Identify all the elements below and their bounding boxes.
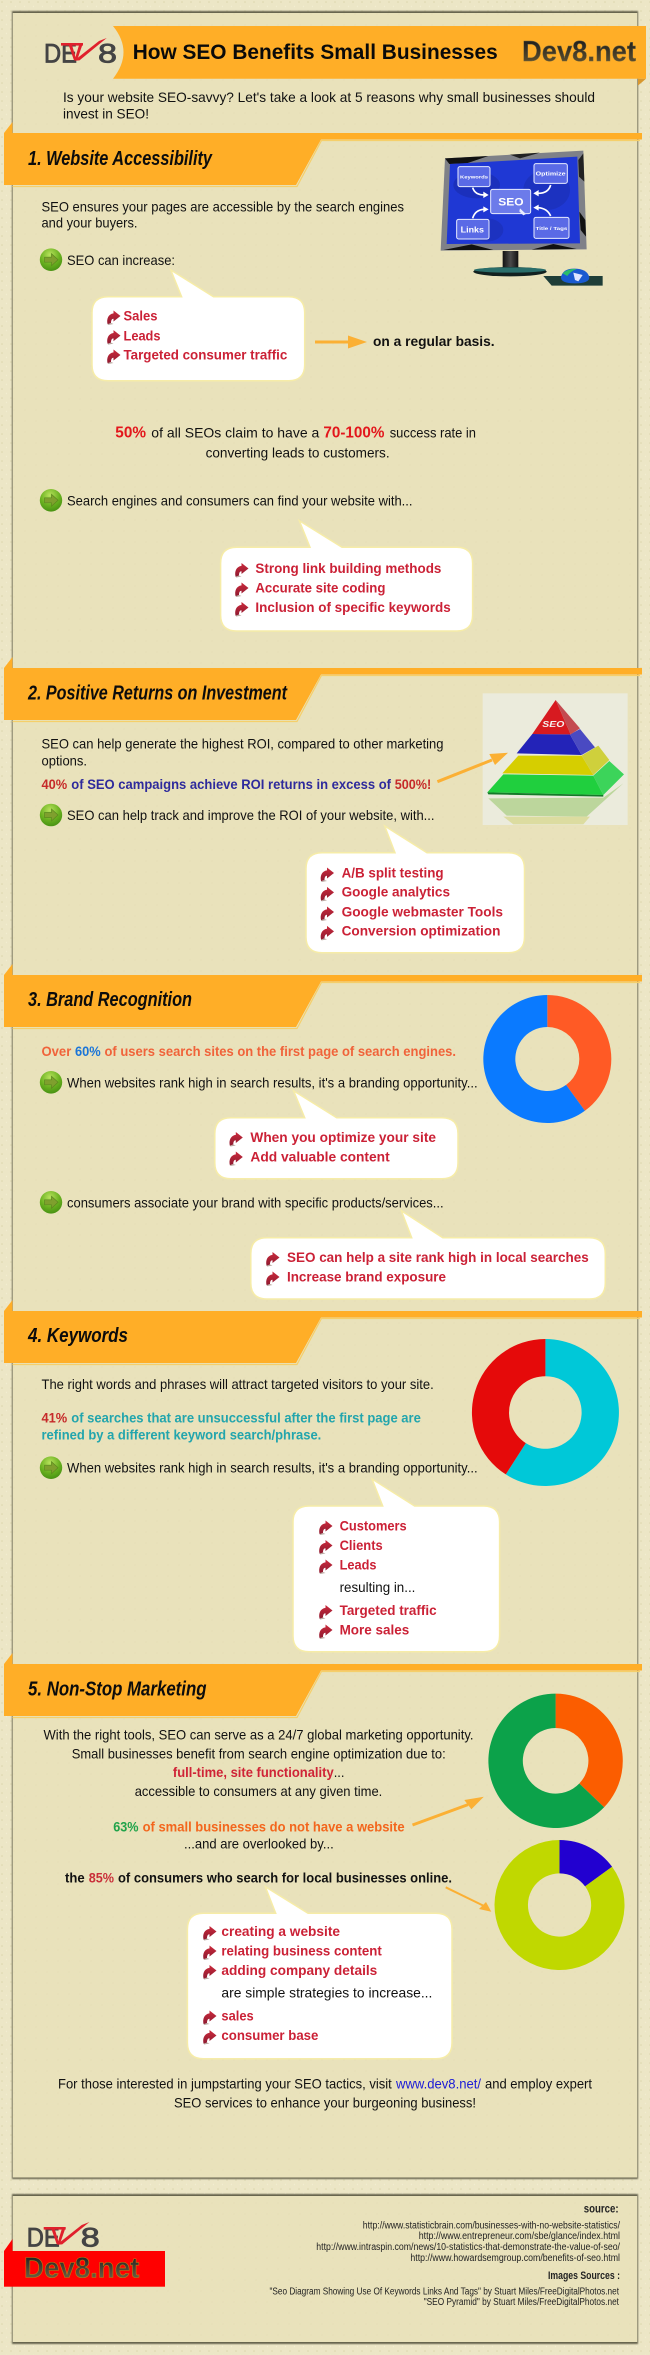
section 4 heading: 4. Keywords — [27, 1325, 128, 1347]
item: relating business content: relating business content — [221, 1943, 382, 1959]
stat: 50% success rate — [115, 425, 476, 460]
icon: red arrow — [107, 330, 120, 345]
box: SEO — [491, 189, 531, 214]
section 2 ribbon — [4, 657, 642, 722]
stat: 60% of users: of users search sites on the first page of search engines. — [104, 1043, 456, 1059]
box: Links: Links — [461, 225, 485, 234]
footer sources: http://www.entrepreneur.com/sbe/glance/index.html — [419, 2231, 620, 2242]
icon: red arrow — [229, 1132, 243, 1146]
closing text: For those interested in jumpstarting your SEO tactics, visit — [58, 2077, 392, 2092]
icon: red arrow — [229, 1152, 243, 1166]
box: Keywords — [458, 167, 490, 187]
icon: red arrow — [235, 602, 248, 616]
box: Links — [457, 219, 489, 239]
paragraph: 24/7 marketing: full-time, site functionality — [173, 1764, 334, 1780]
panel: footer background — [13, 2196, 637, 2342]
stat: 40% of campaigns: 500%! — [395, 776, 431, 792]
footer sources: http://www.howardsemgroup.com/benefits-of-seo.html — [410, 2253, 620, 2264]
logo: DEV8 header: DE — [44, 38, 77, 68]
icon: green bullet — [40, 1191, 62, 1214]
paragraph: accessibility — [42, 200, 404, 230]
panel: section 1 website accessibility — [4, 122, 642, 631]
logo: DEV8 header — [44, 38, 117, 68]
item: Increase brand exposure: Increase brand exposure — [287, 1269, 446, 1285]
closing text — [58, 2077, 592, 2111]
stat: 50% success rate: 70-100% — [323, 425, 384, 442]
stat: 41% of searches — [42, 1410, 421, 1442]
icon: red arrow — [321, 887, 334, 901]
text: consumers associate: consumers associate your brand with specific products/services... — [67, 1195, 444, 1210]
icon: green bullet — [40, 1071, 62, 1094]
illustration: SEO monitor — [441, 151, 603, 286]
item: When you optimize your site: When you optimize your site — [250, 1129, 436, 1145]
title: How SEO Benefits Small Businesses — [133, 40, 498, 64]
item: Leads: Leads — [124, 327, 161, 343]
stat: 63% of small businesses: of small businesses do not have a website — [143, 1819, 405, 1835]
panel: section 2 positive returns — [4, 657, 642, 953]
item: creating a website: creating a website — [221, 1923, 340, 1939]
logo: DEV8 footer — [27, 2222, 100, 2252]
icon: red arrow — [321, 906, 334, 921]
icon: red arrow — [107, 350, 120, 364]
donut chart: 63% of small businesses — [488, 1694, 623, 1828]
paragraph: 24/7 marketing: With the right tools, SEO can serve as a 24/7 global marketing opportunity. — [44, 1727, 474, 1742]
stat: 50% success rate: converting leads to customers. — [206, 444, 390, 460]
logo: DEV8 footer: V — [51, 2223, 66, 2250]
box: Title / Tags: Title / Tags — [536, 226, 568, 232]
stat: 60% of users: Over — [42, 1043, 72, 1059]
stat: 85% of consumers: 85% — [89, 1869, 114, 1885]
icon: red arrow — [321, 926, 334, 940]
footer banner: red Dev8.net — [4, 2239, 165, 2287]
donut chart: 60% of users — [483, 995, 611, 1123]
logo: DEV8 footer: 8 — [81, 2222, 100, 2252]
brand: Dev8.net header: Dev8.net — [522, 36, 636, 68]
icon: red arrow — [321, 868, 334, 882]
stat: 85% of consumers: the — [65, 1869, 85, 1885]
paragraph: 24/7 marketing — [44, 1727, 474, 1799]
text: SEO can increase: SEO can increase: — [67, 253, 175, 268]
intro text: invest in SEO! — [63, 107, 149, 122]
item: adding company details: adding company details — [221, 1962, 378, 1978]
callout: ROI tools list — [306, 826, 524, 953]
footer banner: red Dev8.net: Dev8.net — [24, 2252, 140, 2284]
item: Clients: Clients — [340, 1537, 383, 1553]
stat: 50% success rate: 50% — [115, 425, 146, 442]
arrow: to second chart — [446, 1887, 491, 1912]
closing text: SEO services to enhance your burgeoning business! — [174, 2096, 476, 2111]
stat: 40% of campaigns: 40% — [42, 776, 68, 792]
item: Inclusion of specific keywords: Inclusion of specific keywords — [255, 599, 451, 615]
icon: red arrow — [203, 1926, 216, 1940]
panel: section 5 non-stop marketing — [4, 1653, 642, 2111]
item: SEO can help a site rank high in local searches: SEO can help a site rank high in local searches — [287, 1249, 589, 1265]
donut chart: 85% of consumers — [495, 1840, 625, 1970]
section 4 ribbon — [4, 1300, 642, 1364]
footer sources: Images Sources : — [548, 2270, 620, 2282]
box: Keywords: Keywords — [460, 175, 488, 181]
text: on a regular basis: on a regular basis. — [373, 333, 495, 349]
text: simple strategies: are simple strategies to increase... — [221, 1985, 432, 2001]
box: Title / Tags — [534, 217, 569, 238]
item: A/B split testing: A/B split testing — [342, 864, 444, 880]
icon: red arrow — [319, 1540, 332, 1554]
callout: find your website list — [221, 521, 473, 631]
item: Sales: Sales — [124, 308, 158, 324]
icon: red arrow — [319, 1560, 332, 1574]
footer sources: source: — [584, 2202, 619, 2216]
section 3 ribbon — [4, 964, 642, 1028]
footer sources — [270, 2202, 620, 2308]
stat: 41% of searches: of searches that are unsuccessful after the first page are — [71, 1410, 421, 1426]
section 1 ribbon — [4, 122, 642, 186]
paragraph: 24/7 marketing: accessible to consumers at any given time. — [135, 1784, 382, 1799]
stat: 85% of consumers: of consumers who search for local businesses online. — [118, 1869, 452, 1885]
box: SEO: SEO — [498, 196, 524, 208]
item: Strong link building methods: Strong link building methods — [255, 560, 442, 576]
intro text — [63, 90, 595, 122]
icon: red arrow — [235, 563, 248, 578]
section 1 heading: 1. Website Accessibility — [28, 148, 213, 170]
stat: 60% of users: 60% — [75, 1043, 101, 1059]
callout: optimize list — [215, 1091, 458, 1179]
icon: red arrow — [319, 1605, 332, 1620]
icon: red arrow — [319, 1520, 332, 1535]
text: branding opportunity: When websites rank high in search results, it's a branding opportunity... — [67, 1461, 478, 1476]
section 3 heading: 3. Brand Recognition — [28, 989, 192, 1011]
header ribbon — [113, 26, 646, 86]
callout: customers list — [293, 1479, 500, 1652]
icon: red arrow — [203, 2030, 216, 2044]
logo: DEV8 header: 8 — [98, 38, 117, 68]
paragraph: ROI: options. — [42, 753, 87, 768]
stat: 41% of searches: 41% — [42, 1410, 68, 1426]
section 5 ribbon — [4, 1653, 642, 1718]
arrow: to regular basis — [315, 336, 367, 348]
stat: 50% success rate: of all SEOs claim to have a — [151, 425, 320, 441]
section 5 heading: 5. Non-Stop Marketing — [28, 1679, 206, 1701]
closing text: www.dev8.net/ — [395, 2077, 481, 2092]
icon: red arrow — [235, 582, 248, 597]
arrow: to pyramid — [437, 753, 508, 782]
item: Google webmaster Tools: Google webmaster Tools — [342, 903, 503, 919]
icon: red arrow — [319, 1624, 332, 1639]
donut chart: 41% of searches — [472, 1339, 619, 1486]
panel: section 3 brand recognition — [4, 964, 642, 1299]
paragraph: accessibility: SEO ensures your pages are accessible by the search engines — [42, 200, 404, 215]
text: track and improve: SEO can help track and improve the ROI of your website, with... — [67, 808, 434, 823]
item: Leads: Leads — [340, 1556, 377, 1572]
paragraph: 24/7 marketing: Small businesses benefit from search engine optimization due to: — [72, 1746, 446, 1761]
paragraph: ROI: SEO can help generate the highest ROI, compared to other marketing — [42, 737, 444, 752]
stat: 40% of campaigns: of SEO campaigns achieve ROI returns in excess of — [71, 776, 391, 792]
text: resulting in: resulting in... — [340, 1579, 415, 1595]
paragraph: accessibility: and your buyers. — [42, 215, 138, 230]
icon: red arrow — [203, 1965, 216, 1980]
logo: DEV8 header: V — [68, 39, 83, 66]
paragraph: right words: The right words and phrases will attract targeted visitors to your site. — [42, 1377, 434, 1392]
box: Optimize: Optimize — [536, 171, 566, 177]
stat: 50% success rate: success rate in — [390, 425, 476, 441]
icon: red arrow — [266, 1272, 280, 1286]
paragraph: ROI — [42, 737, 444, 768]
item: Add valuable content: Add valuable content — [250, 1148, 390, 1164]
text: branding opportunity: When websites rank high in search results, it's a branding opportunity... — [67, 1075, 478, 1090]
callout: increase list — [92, 270, 305, 381]
item: sales: sales — [221, 2008, 254, 2024]
item: Customers: Customers — [340, 1517, 407, 1533]
logo: DEV8 footer: DE — [27, 2222, 60, 2252]
icon: red arrow — [107, 310, 120, 325]
icon: red arrow — [203, 2010, 216, 2025]
stat: 41% of searches: refined by a different keyword search/phrase. — [42, 1426, 321, 1442]
callout: local search list — [251, 1211, 605, 1299]
stat: 63% of small businesses: 63% — [113, 1819, 139, 1835]
item: consumer base: consumer base — [221, 2027, 319, 2043]
box: Optimize — [534, 164, 567, 183]
closing text: and employ expert — [485, 2077, 592, 2092]
item: More sales: More sales — [340, 1621, 409, 1637]
item: Targeted consumer traffic: Targeted consumer traffic — [124, 347, 288, 363]
icon: green bullet — [40, 248, 62, 271]
icon: red arrow — [266, 1252, 280, 1266]
item: Targeted traffic: Targeted traffic — [340, 1602, 437, 1618]
arrow: to first chart — [412, 1797, 484, 1825]
panel: section 4 keywords — [4, 1300, 642, 1652]
icon: green bullet — [40, 1456, 62, 1479]
intro text: Is your website SEO-savvy? Let's take a look at 5 reasons why small businesses should — [63, 90, 595, 105]
icon: red arrow — [203, 1946, 216, 1960]
callout: strategies list — [187, 1887, 452, 2059]
illustration: SEO pyramid — [483, 693, 628, 825]
paragraph: 24/7 marketing: ... — [334, 1765, 344, 1780]
icon: green bullet — [40, 804, 62, 826]
arrows: into SEO box — [473, 185, 551, 218]
item: Google analytics: Google analytics — [342, 884, 450, 900]
item: Accurate site coding: Accurate site coding — [255, 580, 385, 596]
illustration: SEO pyramid: SEO — [542, 719, 565, 729]
text: overlooked by: ...and are overlooked by... — [184, 1837, 334, 1852]
icon: green bullet — [40, 489, 62, 512]
section 2 heading: 2. Positive Returns on Investment — [27, 682, 288, 704]
item: Conversion optimization: Conversion optimization — [342, 923, 500, 939]
text: search engines and consumers: Search engines and consumers can find your website with... — [67, 493, 412, 508]
